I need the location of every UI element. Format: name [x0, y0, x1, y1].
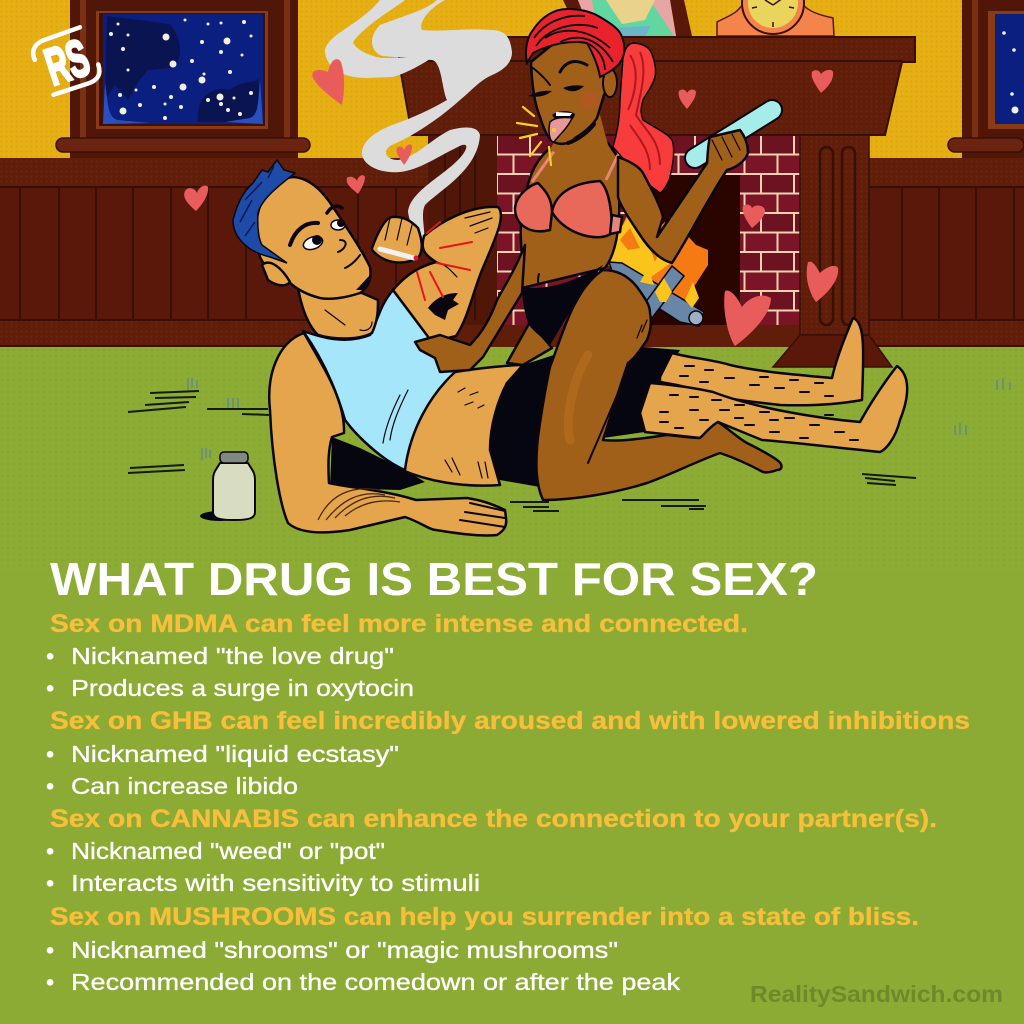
text block: GHB: Nicknamed "liquid ecstasy" [71, 741, 399, 767]
man: fist with joint [372, 217, 422, 263]
panel: wood wainscot [0, 158, 1024, 348]
text block: MDMA: • [46, 675, 54, 701]
hearts [184, 59, 838, 346]
woman: pink bra [515, 150, 622, 237]
floor [0, 347, 1024, 570]
man: torso and belly [402, 365, 523, 486]
man: lower arm [269, 333, 506, 536]
text block: mushrooms: Sex on MUSHROOMS can help you surrender into a state of bliss. [50, 903, 919, 931]
logo: RS badge [29, 25, 104, 100]
logo: RS badge: RS [38, 29, 96, 97]
leg hair [660, 366, 858, 440]
woman: face features [528, 61, 599, 142]
man: blue hair [233, 160, 295, 263]
man: back leg [660, 318, 863, 405]
panel: fireplace [399, 37, 915, 367]
text block: cannabis: Sex on CANNABIS can enhance the connection to your partner(s). [50, 805, 937, 833]
man: face features [290, 206, 370, 290]
source credit: RealitySandwich.com [750, 981, 1003, 1007]
floor shadow [330, 437, 500, 533]
picture on the mantel [563, 0, 692, 36]
woman: far leg [507, 322, 552, 365]
woman: thigh and knee [536, 270, 782, 500]
panel: left night window [56, 0, 310, 158]
man: raised arm [393, 207, 501, 342]
text block: GHB [46, 707, 970, 799]
man: front leg [640, 366, 907, 452]
text block: MDMA: Produces a surge in oxytocin [71, 675, 414, 701]
man: tank top [303, 290, 455, 470]
text block: cannabis: Nicknamed "weed" or "pot" [71, 838, 385, 864]
floor motion lines [128, 391, 916, 511]
text block: mushrooms: Recommended on the comedown or after the peak [71, 969, 680, 995]
text block: GHB: Sex on GHB can feel incredibly aroused and with lowered inhibitions [50, 707, 970, 735]
text block: cannabis: • [46, 838, 54, 864]
text block: MDMA: • [46, 643, 54, 669]
text block: cannabis: • [46, 870, 54, 896]
text block: mushrooms [46, 903, 919, 995]
text block: MDMA: Sex on MDMA can feel more intense and connected. [50, 610, 748, 638]
woman: black bikini [522, 265, 603, 345]
man: ear [262, 263, 290, 285]
woman: torso [521, 143, 619, 288]
fire flames [603, 213, 708, 310]
man: black shorts [490, 340, 680, 500]
smoke from the joint [325, 0, 512, 245]
yellow exclamation lines [517, 107, 551, 165]
grass tufts [188, 378, 1010, 460]
man: head [256, 177, 371, 299]
armpit hair [428, 293, 459, 320]
text block: GHB: Can increase libido [71, 773, 298, 799]
figure: woman [415, 9, 782, 500]
wall background [0, 0, 1024, 160]
text block: mushrooms: • [46, 937, 54, 963]
text block: mushrooms: • [46, 969, 54, 995]
clock on the mantel [717, 0, 834, 36]
text block: MDMA: Nicknamed "the love drug" [71, 643, 394, 669]
woman: arm reaching down [415, 245, 525, 372]
text block: GHB: • [46, 741, 54, 767]
woman: raised arm and hand [618, 130, 748, 263]
title: WHAT DRUG IS BEST FOR SEX? [50, 553, 818, 605]
pale toy held in hand [695, 110, 772, 158]
fireplace column [773, 135, 892, 367]
woman: face [531, 30, 612, 144]
text block: MDMA [46, 610, 748, 701]
mantel [399, 37, 915, 135]
text block: cannabis [46, 805, 937, 896]
panel: right night window [948, 0, 1024, 158]
woman: neck [550, 115, 612, 165]
text block: cannabis: Interacts with sensitivity to stimuli [71, 870, 480, 896]
milk bottle [200, 452, 255, 521]
figure: reclining man [233, 160, 907, 536]
woman: red hair [526, 9, 624, 77]
man: neck [297, 283, 378, 339]
text area background [0, 570, 1024, 1024]
woman: ponytail [613, 43, 674, 193]
text block: GHB: • [46, 773, 54, 799]
fire logs [609, 262, 704, 326]
text block: mushrooms: Nicknamed "shrooms" or "magic mushrooms" [71, 937, 618, 963]
woman: ear [603, 69, 617, 97]
red sensation lines [417, 222, 472, 300]
